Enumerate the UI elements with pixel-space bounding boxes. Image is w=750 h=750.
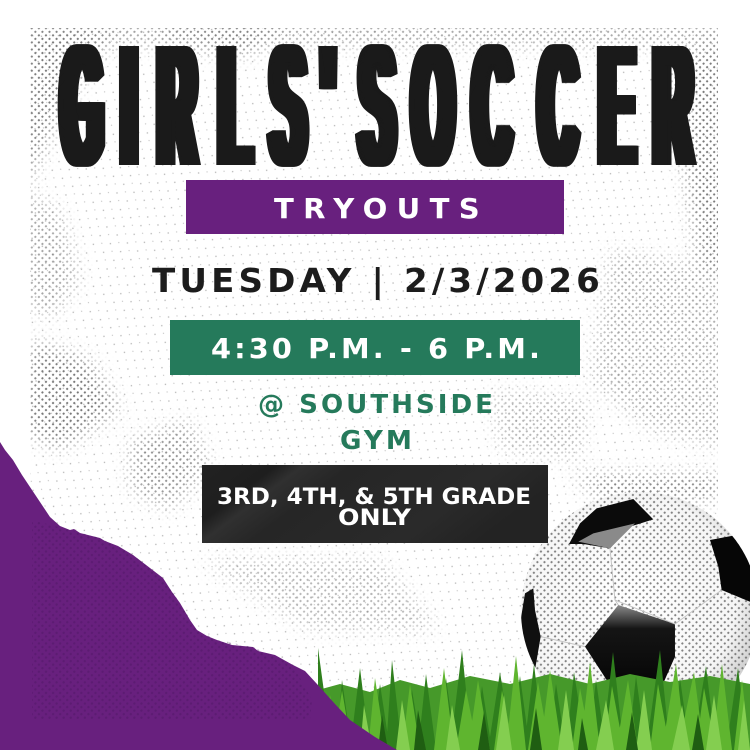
ball panel: center black — [585, 605, 675, 681]
banner: tryouts — [186, 180, 564, 234]
date line: TUESDAY | 2/3/2026 — [152, 261, 604, 300]
banner: grade eligibility: ONLY — [338, 506, 412, 531]
location: @ SOUTHSIDE — [258, 390, 496, 420]
title: C — [539, 8, 577, 202]
time label: 4:30 P.M. - 6 P.M. — [211, 332, 543, 365]
title: C — [473, 8, 511, 202]
ball panel: bottom right sliver — [725, 683, 750, 710]
title: O — [413, 8, 453, 202]
grass — [300, 648, 750, 750]
ball panel: top black — [569, 499, 653, 548]
banner: grade eligibility — [202, 465, 548, 543]
title: S — [360, 8, 394, 202]
banner: time — [170, 320, 580, 375]
title — [58, 8, 697, 202]
grade label: 3RD, 4TH, & 5TH GRADE — [217, 485, 531, 510]
title: I — [122, 8, 136, 202]
grass dark blades — [318, 648, 748, 750]
title: G — [62, 8, 102, 202]
grass bright blades — [324, 656, 750, 750]
ball panel: right black — [710, 536, 750, 602]
location — [258, 390, 496, 456]
ball panel: left black — [521, 588, 541, 670]
title: ' — [322, 8, 334, 202]
grass deep shadows — [378, 708, 704, 750]
torn purple corner — [0, 442, 397, 750]
grass base mass — [300, 674, 750, 750]
title: L — [219, 8, 251, 202]
ball seams — [541, 548, 722, 647]
title: S — [271, 8, 305, 202]
tryouts label: TRYOUTS — [274, 192, 489, 225]
title: R — [158, 8, 196, 202]
icon: soccer ball — [521, 492, 750, 682]
title: R — [654, 8, 692, 202]
halftone on purple — [32, 520, 312, 720]
title: E — [600, 8, 634, 202]
grass light blades — [360, 690, 750, 750]
location: GYM — [340, 426, 415, 456]
